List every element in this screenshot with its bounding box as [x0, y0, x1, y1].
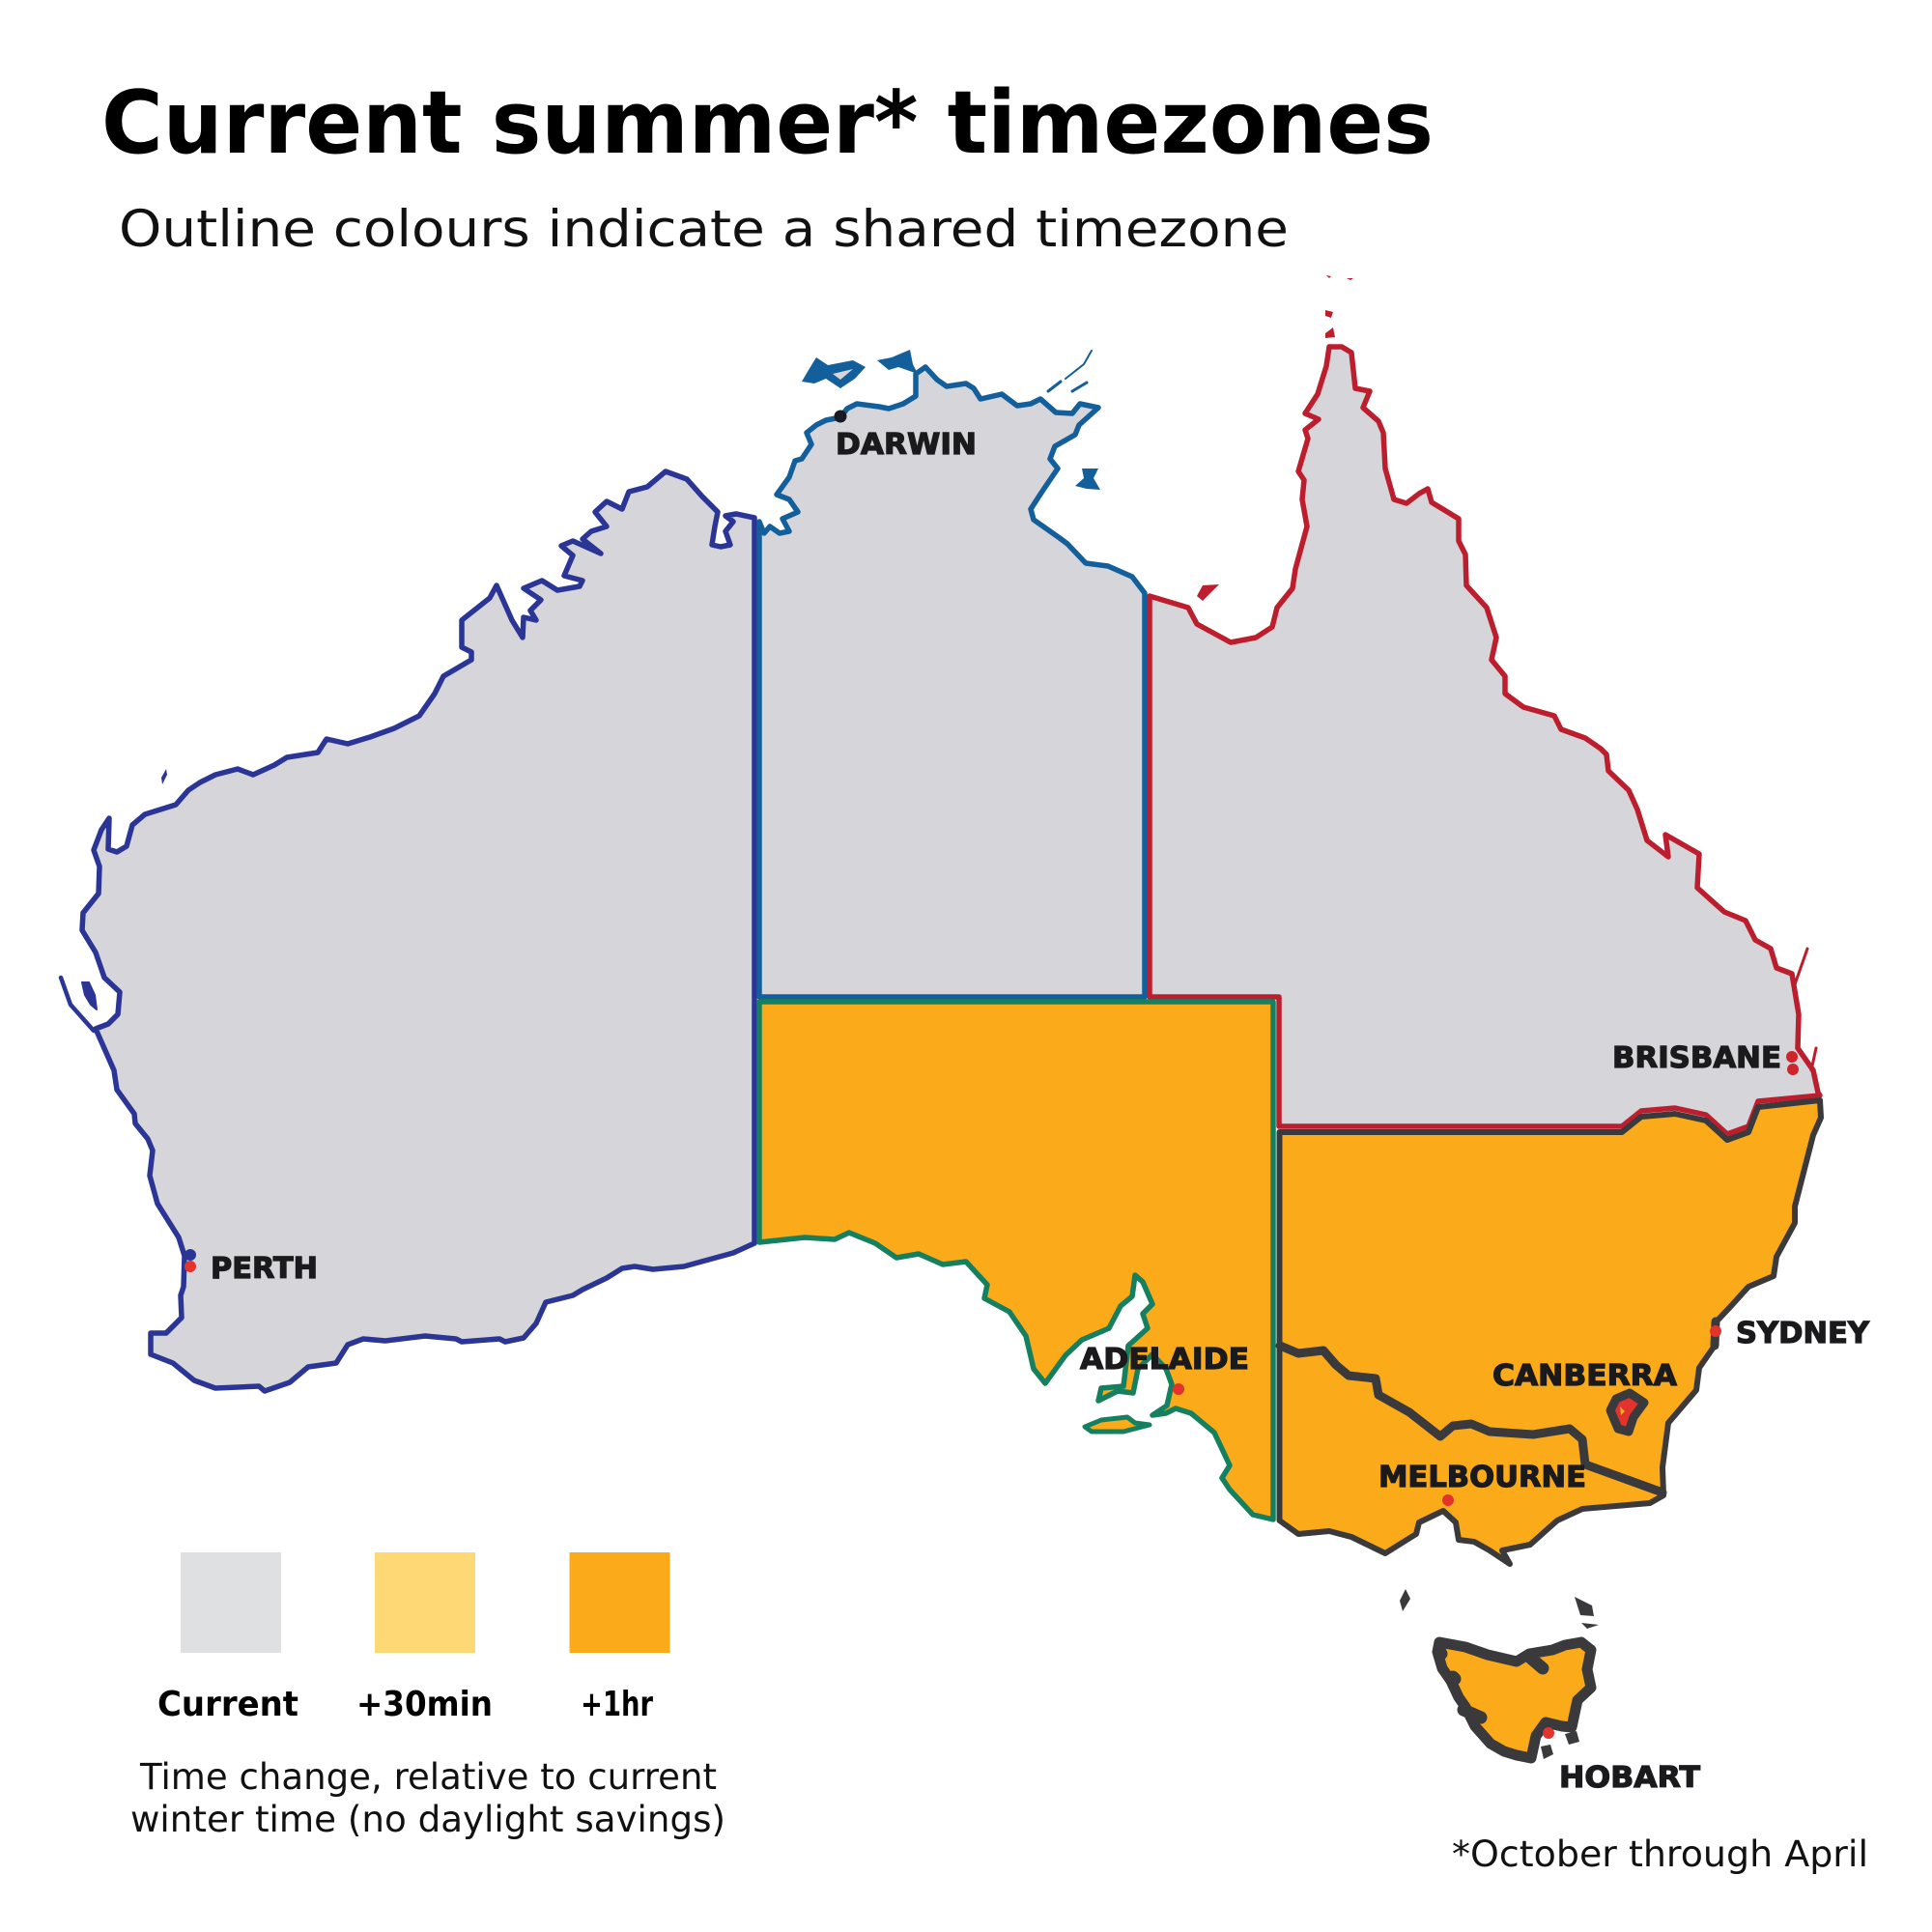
region: Western Australia [61, 471, 754, 1391]
island: Melville and Bathurst [802, 357, 866, 388]
island: Groote Eylandt [1075, 469, 1100, 490]
coast thickening: Sydney [1715, 1321, 1716, 1346]
title: Current summer* timezones [101, 72, 1434, 174]
border: Murray River [1280, 1346, 1662, 1492]
label: +1hr: +1hr [581, 1685, 653, 1724]
label: Adelaide: ADELAIDE [1080, 1343, 1249, 1377]
region: Queensland [1150, 275, 1820, 1134]
island: Mornington [1197, 584, 1219, 601]
peninsula: Cobourg [877, 350, 918, 374]
label: Hobart: HOBART [1559, 1761, 1701, 1795]
islands: Bruny and Tasman [1541, 1731, 1579, 1759]
island: Moreton [1811, 1048, 1816, 1070]
territory: ACT [1610, 1393, 1644, 1432]
legend note: Time change, relative to current [139, 1756, 717, 1798]
island: Dirk Hartog [61, 978, 94, 1031]
island: Barrow [161, 769, 167, 784]
islands: Wessel arc [1065, 351, 1092, 379]
footnote: *October through April [1452, 1833, 1868, 1875]
legend note [130, 1756, 725, 1840]
region: South Australia [759, 1002, 1273, 1520]
island: King [1400, 1589, 1410, 1611]
region: New South Wales and Victoria [1279, 1100, 1821, 1564]
region: Northern Territory [759, 350, 1145, 997]
island: Fraser [1794, 949, 1807, 987]
label: Melbourne: MELBOURNE [1378, 1461, 1586, 1494]
marker: Adelaide [1173, 1383, 1184, 1395]
marker: Brisbane [1787, 1064, 1799, 1075]
marker: Hobart [1543, 1727, 1554, 1739]
subtitle: Outline colours indicate a shared timezone [119, 200, 1289, 259]
region: Tasmania [1400, 1589, 1599, 1759]
marker: Perth outer [185, 1249, 196, 1261]
island: Kangaroo Island [1085, 1417, 1150, 1432]
islands: Torres Strait [1325, 275, 1353, 338]
label: Darwin: DARWIN [836, 428, 977, 462]
inlets: Tamar and Macquarie Harbour [1440, 1652, 1543, 1718]
label: Current: Current [157, 1685, 298, 1724]
label: Sydney: SYDNEY [1736, 1317, 1870, 1350]
city labels [211, 428, 1870, 1795]
marker: Melbourne [1442, 1494, 1454, 1506]
island interior [833, 369, 853, 380]
label: Perth: PERTH [211, 1252, 318, 1286]
label: Canberra: CANBERRA [1492, 1359, 1678, 1393]
swatch: +1hr [570, 1552, 670, 1653]
island: Peron [82, 982, 97, 1009]
legend [130, 1552, 725, 1840]
Jervis detail [1620, 1406, 1625, 1415]
label: Brisbane: BRISBANE [1612, 1041, 1781, 1075]
legend note: winter time (no daylight savings) [130, 1799, 725, 1840]
city markers [185, 410, 1799, 1739]
marker: Sydney [1710, 1325, 1721, 1337]
islands: Crocker [1048, 382, 1087, 391]
swatch: +30min [375, 1552, 475, 1653]
label: +30min: +30min [356, 1685, 493, 1724]
marker: Darwin [835, 410, 846, 423]
map of Australia [61, 275, 1821, 1759]
swatch: current [181, 1552, 281, 1653]
marker: Brisbane outer [1786, 1051, 1798, 1063]
island: Flinders [1575, 1597, 1599, 1629]
marker: Perth [185, 1261, 196, 1272]
